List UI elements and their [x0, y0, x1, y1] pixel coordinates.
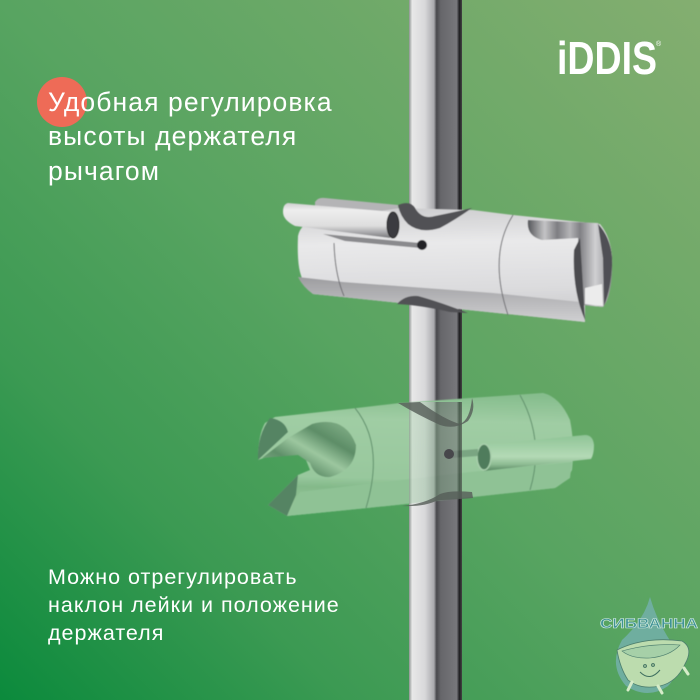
holder body: [298, 208, 612, 322]
lower jaw face: [268, 475, 298, 516]
brand text: СИБВАННА: [600, 615, 698, 631]
lever pivot: [417, 240, 427, 250]
text block: tilt adjustment: держателя: [48, 621, 164, 645]
right jaw face: [598, 224, 612, 306]
seam lines: [355, 395, 536, 508]
hook cradle: [262, 422, 356, 477]
lower lever: [397, 296, 468, 313]
upper lever: [398, 203, 472, 230]
text block: tilt adjustment: Можно отрегулировать: [48, 565, 298, 589]
front tube: [283, 203, 393, 238]
lever slot: [452, 449, 478, 458]
hook cradle: [528, 220, 612, 307]
bath face: [640, 664, 660, 677]
chrome shower bar: [409, 0, 462, 700]
ghost lower lever: [402, 491, 473, 506]
logo: iddis: iDDIS: [557, 32, 657, 84]
ghost holder: lower position: [258, 393, 594, 516]
ghost lever pivot: [444, 449, 454, 459]
watermark: sibvanna: [600, 597, 698, 693]
heading: height adjustment: Удобная регулировка: [48, 87, 333, 117]
back tube: [482, 435, 594, 471]
logo: iddis: ®: [656, 40, 662, 48]
heading: height adjustment: рычагом: [48, 156, 160, 186]
lever slot: [323, 234, 420, 248]
upper jaw face: [258, 418, 288, 460]
bath feet: [628, 668, 688, 693]
lower jaw face: [574, 238, 585, 320]
tube opening: [477, 444, 491, 470]
seam lines: [334, 215, 513, 315]
chrome holder: upper position: [283, 198, 612, 322]
back tube: [315, 198, 400, 225]
heading: height adjustment: высоты держателя: [48, 121, 297, 151]
holder body: [258, 393, 573, 516]
tub inner rim: [622, 645, 680, 658]
text block: tilt adjustment: наклон лейки и положение: [48, 593, 340, 617]
water drop: [616, 597, 678, 693]
lower shaded band: [287, 462, 572, 516]
red accent circle: [37, 77, 87, 127]
tube opening: [387, 212, 399, 238]
bathtub: [617, 640, 689, 687]
translucent bar over ghost holder: [398, 398, 473, 507]
ghost upper lever: [398, 398, 473, 427]
chrome highlight: [585, 284, 603, 306]
lower shaded band: [298, 277, 585, 322]
